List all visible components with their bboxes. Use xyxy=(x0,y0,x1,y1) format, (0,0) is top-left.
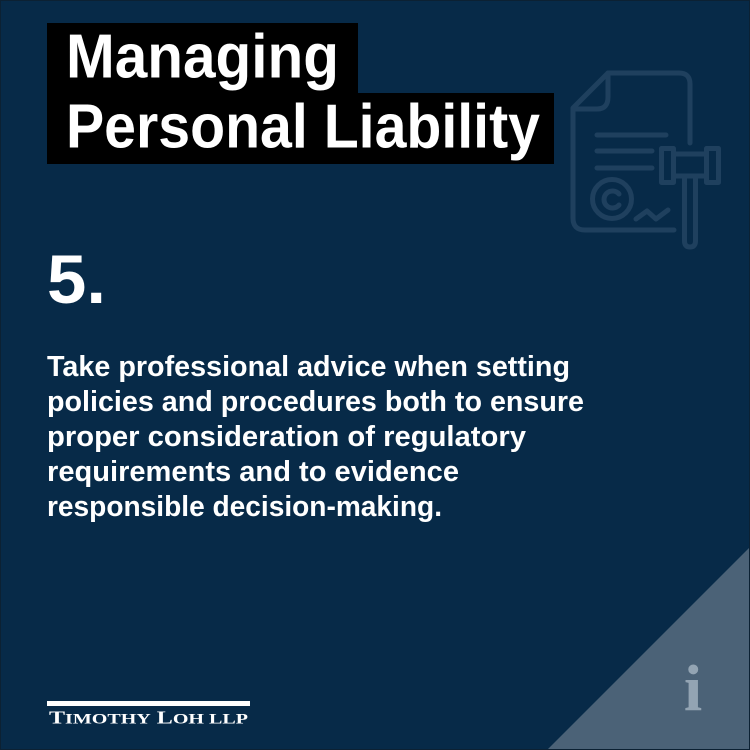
body text: responsible decision-making. xyxy=(47,491,442,523)
footer logo: T IMOTHY L OH LLP xyxy=(49,708,248,728)
body text: policies and procedures both to ensure xyxy=(47,386,584,418)
body text xyxy=(47,351,584,523)
body text: requirements and to evidence xyxy=(47,456,459,488)
icon: document with gavel xyxy=(573,73,718,247)
icon: info i: i xyxy=(684,652,702,725)
title xyxy=(47,22,554,164)
number: 5. xyxy=(47,241,106,318)
body text: Take professional advice when setting xyxy=(47,351,570,383)
body text: proper consideration of regulatory xyxy=(47,421,526,453)
footer logo xyxy=(47,701,250,728)
corner triangle xyxy=(547,547,750,750)
title: Personal Liability xyxy=(66,92,540,162)
title: Managing xyxy=(66,22,339,92)
